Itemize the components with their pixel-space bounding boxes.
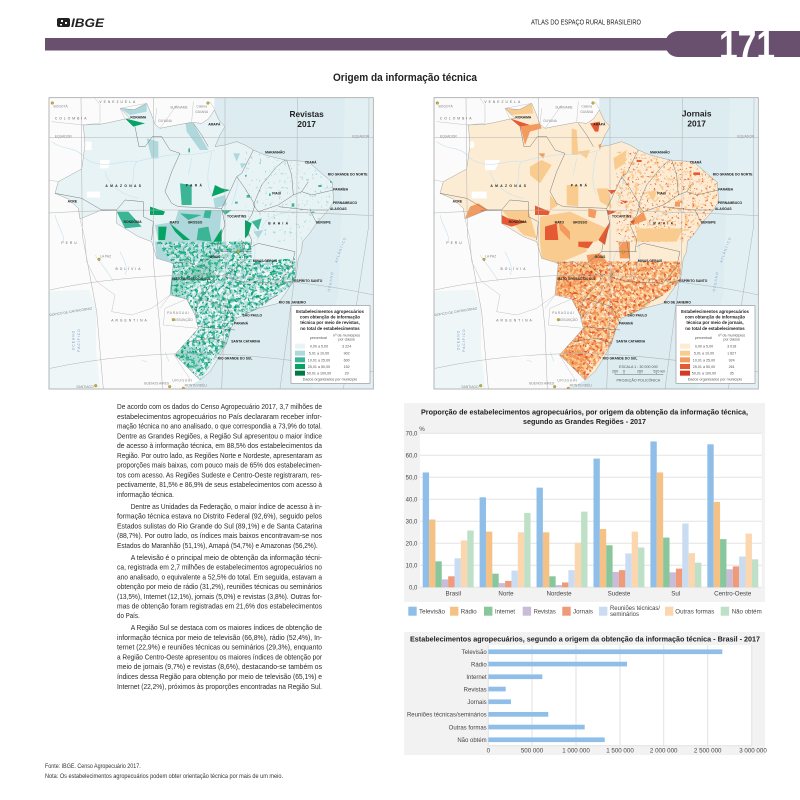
map labels: OCEANO <box>712 271 719 292</box>
map legend: revistas: técnica por meio de revistas, <box>300 320 360 325</box>
map labels: RORAIMA <box>130 116 147 120</box>
y axis: % <box>419 426 425 433</box>
map labels: EQUADOR <box>737 134 755 138</box>
map legend: revistas: 902 <box>344 351 350 355</box>
bar chart: proporção por Grandes Regiões <box>404 403 765 602</box>
header band with page number: 171 <box>719 22 775 68</box>
map labels: GUIANA <box>195 110 209 114</box>
map labels: MATO GROSSO DO SUL <box>172 277 211 281</box>
map labels: PIAUÍ <box>272 190 281 195</box>
body text: Estados sulistas do Rio Grande do Sul (89,1%) e de Santa Catarina <box>117 521 323 530</box>
map labels: URUGUAI <box>557 378 577 382</box>
scale bar: ESCALA 1 : 30 000 000 <box>619 365 658 369</box>
value axis labels: 1 000 000 <box>562 748 590 754</box>
map labels: MONTEVIDÉU <box>185 383 207 388</box>
body text: ano analisado, o equivalente a 52,5% do total. Em seguida, estavam a <box>117 572 323 581</box>
bar chart legend: Revistas <box>534 608 556 615</box>
map legend: jornais: no total de estabelecimentos <box>685 326 745 331</box>
map labels: AMAZONAS <box>490 184 528 188</box>
map labels: GUIANA <box>580 110 594 114</box>
body text: A televisão é o principal meio de obtenção da informação técni- <box>131 553 322 562</box>
map labels: ATLÂNTICO <box>719 236 732 263</box>
category labels: Rádio <box>471 662 487 668</box>
body text: ca, registrada em 2,7 milhões de estabelecimentos agropecuários no <box>117 563 322 572</box>
body text: obtenção por meio de rádio (31,2%), reuniões técnicas ou seminários <box>117 582 322 591</box>
map legend: jornais: 924 <box>729 358 735 362</box>
map labels: RIO GRANDE DO NORTE <box>713 173 753 177</box>
map labels: GUYANA <box>543 119 558 123</box>
map labels: LA PAZ <box>100 254 111 258</box>
map labels: BOLÍVIA <box>501 267 527 271</box>
body text: (13,5%), Internet (12,1%), jornais (5,0%) e revistas (3,8%). Outras for- <box>117 592 322 601</box>
value axis labels: 1 500 000 <box>606 748 634 754</box>
scale bar: 520 km <box>653 369 665 373</box>
map legend: jornais: 5,01 a 10,00 <box>694 351 714 355</box>
y axis: 40,0 <box>406 497 418 503</box>
map labels: PARAÍBA <box>333 187 349 192</box>
map title: Jornais <box>682 108 712 118</box>
map legend: jornais: Dados organizados por município <box>688 378 742 382</box>
map legend: revistas: 25,01 a 50,00 <box>308 365 330 369</box>
map title: Revistas <box>290 109 324 119</box>
value axis labels: 500 000 <box>521 748 544 754</box>
body text: Internet (22,2%), próximos às proporções encontradas na Região Sul. <box>117 682 322 691</box>
map labels: SÃO PAULO <box>628 312 648 317</box>
map labels: PERU <box>446 241 464 245</box>
map labels: SERGIPE <box>701 221 717 225</box>
map labels <box>432 100 755 390</box>
map labels: URUGUAI <box>172 378 192 382</box>
map labels: SERGIPE <box>316 221 332 225</box>
map legend: jornais: técnica por meio de jornais, <box>686 320 744 325</box>
x axis labels: Nordeste <box>546 590 572 598</box>
map labels: RIO GRANDE DO SUL <box>603 357 637 361</box>
map labels: MINAS GERAIS <box>253 259 278 263</box>
body text: mação técnica no ano analisado, o que correspondia a 73,9% do total. <box>117 422 322 431</box>
scale bar: PROJEÇÃO POLICÔNICA <box>616 377 661 382</box>
choropleth: revistas <box>55 103 335 382</box>
map labels: MARANHÃO <box>650 150 670 155</box>
map title: 2017 <box>297 119 316 129</box>
map legend: revistas: 152 <box>344 365 350 369</box>
map legend: revistas: Dados organizados por município <box>303 378 357 382</box>
map labels: MATO <box>170 221 179 225</box>
map labels: PERNAMBUCO <box>333 201 358 205</box>
x axis labels: Sul <box>671 590 680 598</box>
map legend: jornais: Estabelecimentos agropecuários <box>681 309 750 314</box>
body text: Estados do Maranhão (51,1%), Amapá (54,7%) e Amazonas (56,2%). <box>117 541 318 550</box>
body text: a Região Centro-Oeste apresentou os maiores índices de obtenção por <box>117 652 322 661</box>
map labels: EQUADOR <box>440 134 457 138</box>
map legend: jornais: 1 827 <box>727 351 736 355</box>
category labels: Televisão <box>462 650 487 656</box>
y axis: 60,0 <box>406 453 418 459</box>
map labels: GROSSO <box>573 221 588 225</box>
header band with page number <box>45 22 800 68</box>
map labels <box>47 100 370 390</box>
map labels: VENEZUELA <box>99 100 137 104</box>
body text: tos com acesso. As Regiões Sudeste e Centro-Oeste registraram, res- <box>117 470 322 480</box>
map labels: CEARÁ <box>305 159 317 164</box>
map labels: EQUADOR <box>352 134 370 138</box>
map labels: ARGENTINA <box>496 318 534 322</box>
map title: 2017 <box>687 118 706 128</box>
map legend: revistas: no total de estabelecimentos <box>300 326 360 331</box>
x axis labels: Sudeste <box>608 590 631 598</box>
map legend: revistas: 50,01 a 100,00 <box>307 372 331 376</box>
body text: formação técnica estava no Distrito Federal (92,6%), seguido pelos <box>117 512 322 521</box>
map labels: PARANÁ <box>234 320 249 325</box>
map labels: PARÁ <box>571 183 589 188</box>
body text: índices dessa Região para obtenção por meio de televisão (65,1%) e <box>117 672 322 681</box>
map labels: PERU <box>61 241 79 245</box>
category labels: Não obtém <box>457 738 487 744</box>
bar chart legend: Reuniões técnicas/ <box>610 605 660 612</box>
y axis: 50,0 <box>406 475 418 481</box>
map labels: GOIÁS <box>595 254 606 259</box>
body text: mas de obtenção foram registradas em 21,6% dos estabelecimentos <box>117 602 322 610</box>
map labels: LA PAZ <box>485 254 496 258</box>
map labels: ACRE <box>68 200 78 204</box>
bars <box>488 649 722 742</box>
y axis: 0,0 <box>409 585 418 591</box>
body text: proporções mais baixas, com pouco mais de 65% dos estabelecimen- <box>117 461 322 470</box>
map labels: SÃO PAULO <box>243 312 263 317</box>
map labels: ALAGOAS <box>330 207 347 211</box>
map labels: PARÁ <box>186 183 204 188</box>
map labels: SANTA CATARINA <box>616 339 646 343</box>
header: atlas title: ATLAS DO ESPAÇO RURAL BRASILEIRO <box>531 20 641 26</box>
chart title: segundo as Grandes Regiões - 2017 <box>523 417 646 426</box>
scale bar: 260 <box>612 369 618 373</box>
header logo: IBGE: IBGE <box>71 18 104 30</box>
map labels: BOGOTÁ <box>439 104 454 108</box>
map labels: COLOMBIA <box>440 117 473 121</box>
map labels: RORAIMA <box>515 116 532 120</box>
map labels: ARGENTINA <box>111 318 149 322</box>
map labels: SANTIAGO <box>76 385 94 389</box>
horizontal bar chart: Brasil 2017 <box>404 632 767 755</box>
map labels: PARAÍBA <box>718 187 734 192</box>
map labels: RIO DE JANEIRO <box>664 301 691 305</box>
bar chart legend: Jornais <box>573 608 593 615</box>
map legend: revistas: 0,00 a 5,00 <box>310 345 328 349</box>
map labels: RONDÔNIA <box>509 219 527 224</box>
map labels: EQUADOR <box>55 134 72 138</box>
map legend: jornais: 0,00 a 5,00 <box>695 345 713 349</box>
map legend: revistas: com obtenção de informação <box>300 315 360 320</box>
map labels: ESPÍRITO SANTO <box>679 278 708 283</box>
map labels: AMAPÁ <box>593 121 606 126</box>
map labels: SANTA CATARINA <box>231 339 261 343</box>
map title <box>682 110 712 126</box>
map labels: OCEANO <box>71 330 75 350</box>
value axis labels <box>487 748 767 754</box>
map labels: OCEANO <box>456 330 460 350</box>
body text <box>117 402 323 691</box>
chart title: Estabelecimentos agropecuários, segundo a origem da obtenção da informação técnica - Brasil - 2017 <box>410 634 760 644</box>
value axis labels: 2 500 000 <box>694 748 722 754</box>
bar chart legend: Outras formas <box>675 608 714 615</box>
bar chart legend: seminários <box>610 611 639 618</box>
map labels: MINAS GERAIS <box>638 259 663 263</box>
source and note <box>45 763 283 780</box>
map legend: revistas: 600 <box>344 358 350 362</box>
map legend: jornais: 35 <box>730 372 734 376</box>
map labels: CEARÁ <box>690 159 702 164</box>
map panel: Jornais 2017 <box>432 98 758 390</box>
map labels: BUENOS AIRES <box>529 382 555 386</box>
map labels: OCEANO <box>327 271 334 292</box>
category labels: Jornais <box>467 700 487 706</box>
map labels: PERNAMBUCO <box>718 201 743 205</box>
y axis: 70,0 <box>406 431 418 437</box>
map labels: AMAPÁ <box>208 121 221 126</box>
bar chart legend: Internet <box>495 608 515 615</box>
x axis labels: Norte <box>498 590 514 598</box>
map labels: RIO DE JANEIRO <box>279 301 306 305</box>
map labels: ACRE <box>453 200 463 204</box>
map labels: PARAGUAI <box>167 311 189 315</box>
map legend: revistas: 29 <box>345 372 349 376</box>
body text: informação técnica por meio de televisão (66,8%), rádio (52,4%), In- <box>117 633 322 642</box>
map labels: ESPÍRITO SANTO <box>294 278 323 283</box>
map labels: PIAUÍ <box>657 190 666 195</box>
bars: Sul <box>650 441 701 587</box>
x axis labels: Centro-Oeste <box>714 590 752 598</box>
category labels: Internet <box>466 675 487 681</box>
bar chart legend: Rádio <box>461 608 477 615</box>
scale bar <box>612 365 665 382</box>
map labels: RONDÔNIA <box>124 219 142 224</box>
map legend: revistas: 3 224 <box>342 345 351 349</box>
bars: Norte <box>480 497 531 587</box>
chart title <box>421 408 748 426</box>
map labels: PACÍFICO <box>77 328 81 352</box>
body text: informação técnica. <box>117 490 174 499</box>
scale bar: 0 <box>623 369 625 373</box>
map labels: BAHIA <box>653 222 675 226</box>
map legend: revistas: 10,01 a 25,00 <box>308 358 330 362</box>
source and note: Nota: Os estabelecimentos agropecuários podem obter orientação técnica por mais de um meio. <box>45 773 283 780</box>
map legend: jornais: com obtenção de informação <box>685 315 745 320</box>
body text: Dentre as Grandes Regiões, a Região Sul apresentou o maior índice <box>117 431 322 440</box>
body text: A Região Sul se destaca com os maiores índices de obtenção de <box>131 623 322 632</box>
map labels: TRÓPICO DE CAPRICÓRNIO <box>47 305 93 318</box>
map labels: Caiena <box>581 104 592 108</box>
body text: pectivamente, 81,5% e 86,9% de seus estabelecimentos com acesso à <box>117 480 323 489</box>
map labels: MARANHÃO <box>265 150 285 155</box>
map legend: jornais: 261 <box>729 365 735 369</box>
map legend: jornais: percentual <box>695 336 712 340</box>
map labels: TOCANTINS <box>227 214 247 218</box>
category labels <box>407 650 487 744</box>
map labels: AMAZONAS <box>105 184 143 188</box>
map labels: RIO GRANDE DO NORTE <box>328 173 368 177</box>
category labels: Outras formas <box>449 725 487 731</box>
bar chart legend <box>408 605 762 618</box>
map labels: MATO GROSSO DO SUL <box>557 277 596 281</box>
map panel: Revistas 2017 <box>47 98 373 390</box>
body text: (88,7%). Por outro lado, os índices mais baixos encontravam-se nos <box>117 531 322 540</box>
map labels: BOLÍVIA <box>116 267 142 271</box>
map labels: SURINAME <box>170 106 189 110</box>
map legend: revistas: percentual <box>310 336 327 340</box>
y axis: 20,0 <box>406 541 418 547</box>
map labels: PARAGUAI <box>552 311 574 315</box>
y axis: 10,0 <box>406 563 418 569</box>
bars: Nordeste <box>537 488 587 587</box>
map legend: jornais: 10,01 a 25,00 <box>693 358 715 362</box>
x axis labels <box>446 590 752 598</box>
map labels: Caiena <box>196 104 207 108</box>
map legend: revistas <box>291 306 370 383</box>
map labels: RIO GRANDE DO SUL <box>218 357 252 361</box>
map legend: jornais: 3 018 <box>727 345 736 349</box>
y axis: 30,0 <box>406 519 418 525</box>
map labels: SURINAME <box>555 106 574 110</box>
value axis labels: 2 000 000 <box>650 748 678 754</box>
body text: De acordo com os dados do Censo Agropecuário 2017, 3,7 milhões de <box>117 402 322 411</box>
body text: Dentre as Unidades da Federação, o maior índice de acesso à in- <box>131 502 322 511</box>
map labels: ASSUNÇÃO <box>174 317 193 322</box>
source and note: Fonte: IBGE. Censo Agropecuário 2017. <box>45 763 141 770</box>
body text: do País. <box>117 611 140 620</box>
map labels: BOGOTÁ <box>54 104 69 108</box>
bar chart legend: Televisão <box>419 608 446 615</box>
map labels: BUENOS AIRES <box>144 382 170 386</box>
chart title: Proporção de estabelecimentos agropecuários, por origem da obtenção da informação técnica, <box>421 408 748 416</box>
map labels: PARANÁ <box>619 320 634 325</box>
map labels: MONTEVIDÉU <box>570 383 592 388</box>
map labels: COLOMBIA <box>55 117 88 121</box>
map labels: MATO <box>555 221 564 225</box>
map labels: TRÓPICO DE CAPRICÓRNIO <box>432 305 478 318</box>
body text: estabelecimentos agropecuários no País declararam receber infor- <box>117 412 322 421</box>
choropleth: jornais <box>440 103 720 382</box>
bars: Brasil <box>423 472 474 587</box>
map legend: revistas: 5,01 a 10,00 <box>309 351 329 355</box>
map legend: jornais <box>676 306 755 383</box>
value axis labels: 0 <box>487 748 491 754</box>
bars: Sudeste <box>593 459 644 587</box>
body text: ternet (22,9%) e reuniões técnicas ou seminários (29,3%), enquanto <box>117 643 322 652</box>
map labels: TOCANTINS <box>612 214 632 218</box>
bars: Centro-Oeste <box>707 444 758 587</box>
body text: de acesso à informação técnica, em 88,5% dos estabelecimentos da <box>117 441 323 450</box>
map labels: ASSUNÇÃO <box>559 317 578 322</box>
body text: meio de jornais (9,7%) e revistas (8,6%), destacando-se também os <box>117 662 322 671</box>
map labels: BAHIA <box>268 222 290 226</box>
x axis labels: Brasil <box>446 590 461 598</box>
scale bar: 260 <box>637 369 643 373</box>
y axis <box>406 426 425 591</box>
header logo: IBGE <box>57 18 104 30</box>
map labels: GOIÁS <box>210 254 221 259</box>
map legend: revistas: nº de municípios <box>333 333 360 337</box>
map labels: GROSSO <box>188 221 203 225</box>
category labels: Revistas <box>464 687 487 693</box>
map legend: revistas: Estabelecimentos agropecuários <box>296 309 365 314</box>
map labels: GUYANA <box>158 119 173 123</box>
value axis labels: 3 000 000 <box>739 748 767 754</box>
map labels: ALAGOAS <box>715 207 732 211</box>
map legend: revistas: por classe <box>338 338 355 342</box>
body text: Região. Por outro lado, as Regiões Norte e Nordeste, apresentaram as <box>117 451 322 460</box>
map legend: jornais: nº de municípios <box>718 333 745 337</box>
map legend: jornais: 50,01 a 100,00 <box>692 372 716 376</box>
map legend: jornais: por classe <box>723 338 740 342</box>
map labels: SANTIAGO <box>461 385 479 389</box>
page title: Origem da informação técnica <box>333 72 478 84</box>
map labels: VENEZUELA <box>484 100 522 104</box>
bar chart legend: Não obtém <box>732 608 762 615</box>
map labels: ATLÂNTICO <box>334 236 347 263</box>
map legend: jornais: 25,01 a 50,00 <box>693 365 715 369</box>
map title <box>290 111 324 127</box>
map labels: PACÍFICO <box>462 328 466 352</box>
category labels: Reuniões técnicas/seminários <box>407 713 487 719</box>
